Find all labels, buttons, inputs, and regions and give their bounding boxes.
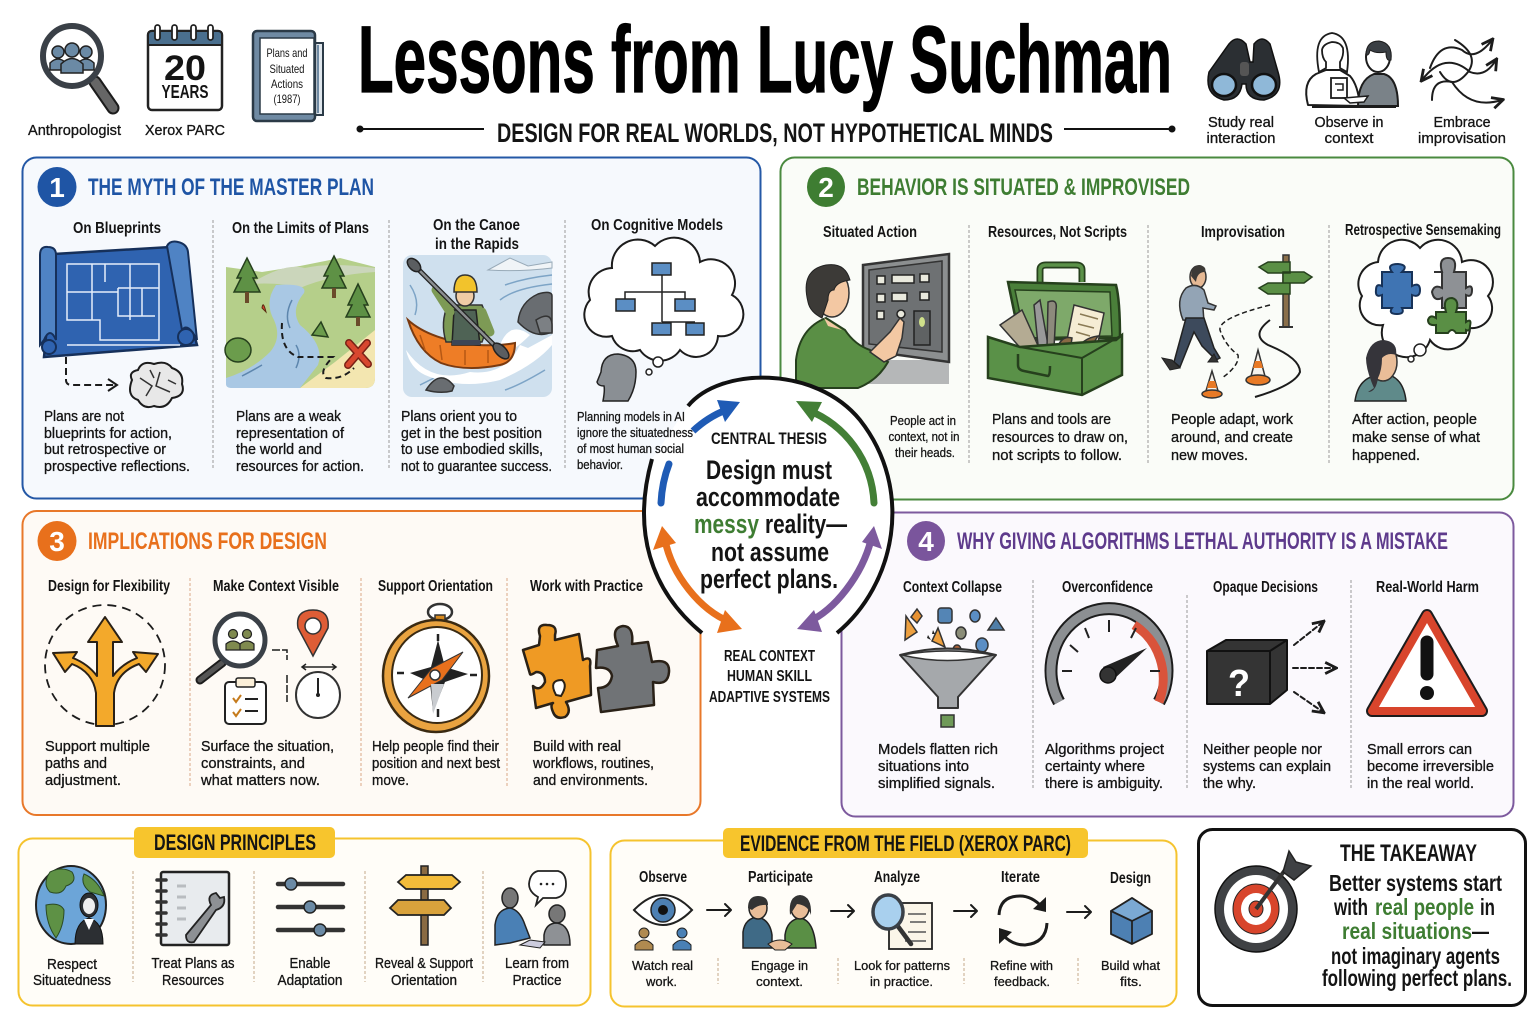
panel: evidence from the field [610,828,1176,1006]
label: learn from practice: Practice [512,972,562,989]
label: real context, human skill, adaptive systems: REAL CONTEXT [724,648,815,665]
badge 3 [38,521,76,561]
body: real-world harm [1367,741,1494,792]
label: study real interaction [1206,114,1276,147]
arrow: green [796,401,874,503]
body: orientation: Help people find their [372,738,499,755]
body: improvisation: new moves. [1171,447,1248,464]
badge 3: 3 [49,526,65,557]
body: limits: representation of [236,425,345,442]
step: iterate [990,869,1053,989]
body: situated action: People act in [890,413,956,428]
tab heading [723,828,1088,858]
thesis statement: reality— [765,509,847,539]
body: practice [532,738,654,789]
body: sensemaking: happened. [1352,447,1420,464]
heading: BEHAVIOR IS SITUATED & IMPROVISED [857,174,1190,201]
tab heading: DESIGN PRINCIPLES [154,830,316,855]
subhead: real-world harm: Real-World Harm [1376,579,1479,596]
thesis statement: accommodate [696,482,840,512]
step: analyze [854,869,950,989]
icon: book Plans and Situated Actions: Actions [271,77,303,91]
body: orientation: move. [372,772,409,789]
badge 4: 4 [918,526,934,557]
icon: warning triangle [1372,615,1482,711]
arrow [954,905,977,917]
arrow: blue [661,400,740,503]
step: participate: context. [756,974,803,989]
arrow [707,904,731,916]
icon: tangled improvisation arrows [1422,40,1502,103]
body: blueprints [44,408,190,475]
takeaway text: with [1333,894,1368,920]
body: resources: not scripts to follow. [992,447,1122,464]
label: reveal and support orientation: Orientation [391,972,457,989]
heading: IMPLICATIONS FOR DESIGN [88,528,327,555]
body: sensemaking: After action, people [1352,411,1477,428]
panel: the takeaway [1198,830,1526,1006]
label: reveal and support orientation: Reveal & Support [375,955,474,972]
body: cognitive models: behavior. [577,457,623,472]
body: flexibility: Support multiple [45,738,150,755]
label: Xerox PARC: Xerox PARC [145,122,225,139]
subhead: canoe: in the Rapids [435,236,519,253]
subhead: canoe [433,217,520,253]
body: improvisation: People adapt, work [1171,411,1293,428]
body: real-world harm: Small errors can [1367,741,1472,758]
body: context visible [200,738,334,789]
body: orientation [372,738,501,789]
label: enable adaptation: Adaptation [278,972,342,989]
step: analyze: Look for patterns [854,958,950,973]
arrow: purple [797,526,882,632]
step: design [1101,870,1160,989]
body: blueprints: but retrospective or [44,441,166,458]
body: situated action: their heads. [895,445,955,460]
body: real-world harm: become irreversible [1367,758,1494,775]
body: real-world harm: in the real world. [1367,775,1474,792]
label: embrace improvisation: improvisation [1418,130,1506,147]
step: iterate: Refine with [990,958,1053,973]
arrow [831,905,854,917]
subhead: on blueprints: On Blueprints [73,220,161,237]
step: observe: work. [645,974,677,989]
body: cognitive models: ignore the situatedness [577,425,693,440]
label: treat plans as resources: Treat Plans as [152,955,234,972]
step: analyze: Analyze [874,869,920,886]
icon: globe with person [36,866,106,944]
label: observe in context [1314,114,1384,147]
step: iterate: Iterate [1001,869,1040,886]
label: real context, human skill, adaptive systems: HUMAN SKILL [727,668,812,685]
badge 4 [907,521,945,561]
label: learn from practice [505,955,569,989]
body: improvisation [1171,411,1293,464]
body: blueprints: prospective reflections. [44,458,190,475]
body: practice: workflows, routines, [532,755,654,772]
label: study real interaction: interaction [1206,130,1276,147]
icon: river map [225,256,375,388]
body: flexibility: paths and [45,755,107,772]
badge 1 [38,167,76,207]
body: context collapse [878,741,998,792]
step: design: Build what [1101,958,1160,973]
icon: black box with question mark: ? [1228,663,1250,705]
subhead: limits of plans: On the Limits of Plans [232,220,369,237]
subhead: cognitive models: On Cognitive Models [591,217,723,234]
body: opaque decisions: systems can explain [1203,758,1331,775]
panel: design principles [18,827,590,1006]
takeaway text: in [1480,894,1495,920]
label: respect situatedness: Situatedness [33,972,111,989]
label: respect situatedness: Respect [47,956,98,973]
subhead: improvisation: Improvisation [1201,224,1285,241]
body: canoe [401,408,552,475]
icon: signpost [390,866,460,945]
body: limits: resources for action. [236,458,364,475]
body: resources: resources to draw on, [992,429,1128,446]
body: blueprints: Plans are not [44,408,125,425]
body: context visible: what matters now. [200,772,320,789]
subhead: orientation: Support Orientation [378,578,493,595]
icon: book Plans and Situated Actions [253,31,323,121]
icon: funnel [900,608,1004,727]
label: observe in context: context [1324,130,1374,147]
thesis statement: Design must [706,455,832,485]
icon: binoculars [1208,39,1280,100]
body: limits: Plans are a weak [236,408,341,425]
label: anthropologist: Anthropologist [28,122,122,139]
icon: 20 years calendar [148,25,222,110]
subhead: resources: Resources, Not Scripts [988,224,1127,241]
label: real context, human skill, adaptive systems [709,648,830,706]
body: cognitive models: Planning models in AI [577,409,685,424]
body: canoe: not to guarantee success. [401,458,552,475]
subhead: overconfidence: Overconfidence [1062,579,1153,596]
subhead: canoe: On the Canoe [433,217,520,234]
icon: green toolbox [988,265,1122,395]
takeaway text: real situations [1342,918,1472,944]
step: participate [743,869,816,989]
panel: 3 implications for design [22,511,700,815]
tab heading [134,827,335,858]
body: flexibility: adjustment. [45,772,121,789]
subhead: flexibility: Design for Flexibility [48,578,170,595]
body: orientation: position and next best [372,755,501,772]
icon: sliders [278,878,343,936]
body: context collapse: Models flatten rich [878,741,998,758]
icon: branching arrows in dashed circle [45,605,165,726]
label: learn from practice: Learn from [505,955,569,972]
icon: interlocking puzzle pieces [523,625,669,718]
header: credentials icons [28,25,323,139]
panel: 1 the myth of the master plan [22,158,760,498]
body: canoe: get in the best position [401,425,542,442]
body: canoe: to use embodied skills, [401,441,543,458]
label: observe in context: Observe in [1314,114,1384,131]
takeaway text: real people [1375,894,1474,920]
body: opaque decisions: the why. [1203,775,1256,792]
thesis statement: messy [694,509,759,539]
step: participate: Participate [748,869,813,886]
panel: 4 lethal authority [842,512,1514,816]
icon: walking man, signpost, cones [1162,255,1312,398]
panel: 2 behavior is situated [780,158,1514,500]
subhead: practice: Work with Practice [530,578,643,595]
label: enable adaptation: Enable [290,955,330,972]
step: iterate: feedback. [994,974,1050,989]
subtitle with rules: DESIGN FOR REAL WORLDS, NOT HYPOTHETICAL MINDS [497,118,1053,148]
label: real context, human skill, adaptive systems: ADAPTIVE SYSTEMS [709,689,830,706]
thesis statement [694,455,847,594]
label: central thesis: CENTRAL THESIS [711,429,827,448]
heading: THE MYTH OF THE MASTER PLAN [88,174,374,201]
step: observe: Watch real [632,958,693,973]
step: observe [632,869,693,989]
body: context visible: constraints, and [201,755,305,772]
tab heading: EVIDENCE FROM THE FIELD (XEROX PARC) [740,831,1071,856]
body: sensemaking [1352,411,1481,464]
step: participate: Engage in [751,958,808,973]
label: study real interaction: Study real [1208,114,1274,131]
label: embrace improvisation: Embrace [1434,114,1490,131]
icon: kayak in rapids [403,255,552,397]
body: cognitive models: of most human social [577,441,684,456]
body: context collapse: situations into [878,758,969,775]
label: respect situatedness [33,956,111,989]
heading: the takeaway: THE TAKEAWAY [1340,840,1477,867]
label: treat plans as resources [152,955,234,989]
icon: 20 years calendar: YEARS [162,82,208,102]
icon: two people observing [1306,33,1398,107]
icon: gauge [1051,609,1167,702]
body: opaque decisions: Neither people nor [1203,741,1322,758]
body: practice: and environments. [533,772,648,789]
central thesis circle [644,378,892,815]
body: sensemaking: make sense of what [1352,429,1481,446]
body: practice: Build with real [533,738,621,755]
body: overconfidence [1045,741,1165,792]
label: treat plans as resources: Resources [162,972,224,989]
header: practice icons [1206,33,1506,147]
arrow: orange [653,526,742,633]
body: context collapse: simplified signals. [878,775,995,792]
icon: blueprint scroll [40,242,197,407]
icon: person at control panel [796,254,949,388]
icon: book Plans and Situated Actions: (1987) [274,92,301,106]
badge 1: 1 [49,172,65,203]
thesis statement: perfect plans. [700,564,838,594]
body: improvisation: around, and create [1171,429,1293,446]
body: overconfidence: certainty where [1045,758,1145,775]
label: embrace improvisation [1418,114,1506,147]
takeaway text: — [1472,918,1489,944]
label: enable adaptation [278,955,342,989]
icon: black box with question mark [1207,622,1335,712]
body: situated action: context, not in [888,429,960,444]
body: resources [992,411,1128,464]
icon: compass [383,604,489,732]
step: design: Design [1110,870,1151,887]
step: observe: Observe [639,869,687,886]
subhead: context visible: Make Context Visible [213,578,339,595]
badge 2 [807,167,845,207]
step: analyze: in practice. [870,974,933,989]
body: canoe: Plans orient you to [401,408,517,425]
body: context visible: Surface the situation, [201,738,334,755]
thesis statement: not assume [711,537,829,567]
takeaway text [1322,870,1512,991]
subhead: situated action: Situated Action [823,224,917,241]
step: design: fits. [1120,974,1142,989]
badge 2: 2 [818,172,834,203]
icon: 20 years calendar: 20 [164,49,206,88]
icon: context magnifier, pin, clipboard, timer [200,610,340,724]
body: opaque decisions [1203,741,1331,792]
icon: book Plans and Situated Actions: Plans and [266,46,308,60]
body: overconfidence: there is ambiguity. [1045,775,1163,792]
body: flexibility [45,738,150,789]
body: resources: Plans and tools are [992,411,1111,428]
body: blueprints: blueprints for action, [44,425,172,442]
icon: thought cloud with puzzle pieces [1355,240,1493,401]
icon: thought cloud with diagram [584,238,743,401]
body: situated action [888,413,960,460]
icon: people talking [495,871,570,948]
label: reveal and support orientation [375,955,474,989]
body: overconfidence: Algorithms project [1045,741,1165,758]
icon: target with dart [1215,851,1311,952]
body: limits [236,408,364,475]
body: cognitive models [577,409,693,472]
arrow [1067,906,1091,918]
subhead: context collapse: Context Collapse [903,579,1002,596]
subhead: opaque decisions: Opaque Decisions [1213,579,1318,596]
icon: notebook with wrench [157,872,229,945]
icon: anthropologist magnifier [43,26,113,108]
icon: book Plans and Situated Actions: Situated [270,62,304,76]
body: limits: the world and [236,441,322,458]
